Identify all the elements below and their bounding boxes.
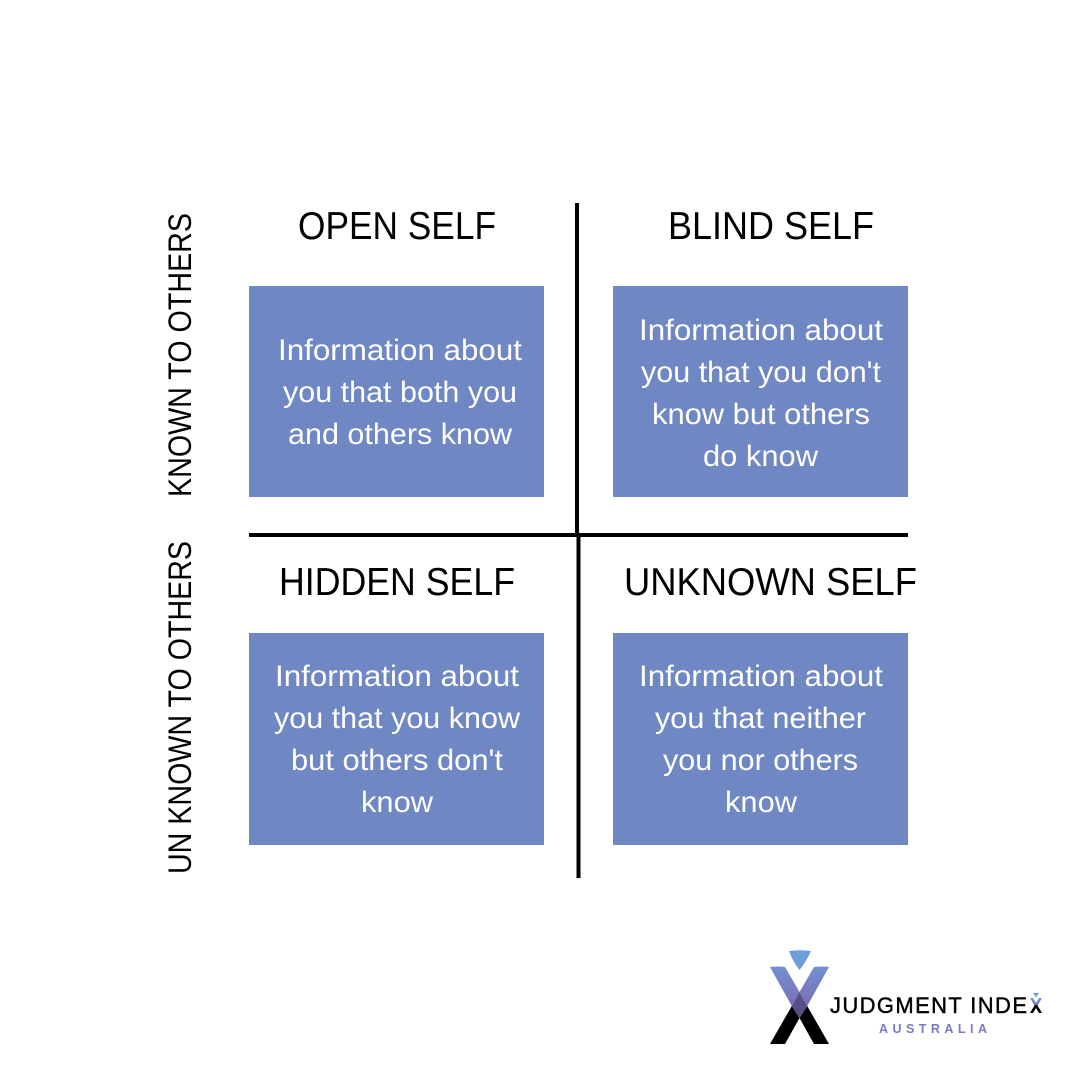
heading: hidden self: HIDDEN SELF: [279, 561, 515, 604]
box: hidden self: [249, 633, 544, 845]
box: open self: [249, 286, 544, 497]
side label: known to others: KNOWN TO OTHERS: [162, 213, 198, 497]
box: unknown self: [613, 633, 908, 845]
horizontal divider: [249, 533, 908, 537]
tagline: AUSTRALIA: [879, 1022, 987, 1036]
box: blind self: do know: [703, 440, 818, 473]
box: open self: and others know: [288, 418, 512, 451]
heading: blind self: BLIND SELF: [668, 205, 874, 248]
side label: unknown to others: UN KNOWN TO OTHERS: [162, 541, 198, 874]
panel: unknown self: [613, 561, 917, 845]
box: hidden self: know: [361, 786, 433, 819]
box: unknown self: know: [725, 786, 797, 819]
icon: X figure mark: [770, 950, 829, 1044]
box: unknown self: you nor others: [663, 744, 858, 777]
box: hidden self: you that you know: [274, 702, 520, 735]
heading: unknown self: UNKNOWN SELF: [624, 561, 917, 604]
box: blind self: know but others: [652, 398, 870, 431]
box: unknown self: you that neither: [655, 702, 866, 735]
wordmark: JUDGMENT INDE: [830, 993, 1027, 1018]
box: unknown self: Information about: [639, 660, 884, 693]
heading: open self: OPEN SELF: [298, 205, 496, 248]
box: hidden self: Information about: [275, 660, 520, 693]
box: hidden self: but others don't: [291, 744, 504, 777]
panel: hidden self: [249, 561, 544, 845]
logo: Judgment Index Australia: [770, 950, 1042, 1044]
vertical divider: [575, 203, 580, 878]
box: open self: Information about: [278, 334, 523, 367]
panel: blind self: [613, 205, 908, 497]
panel: open self: [249, 205, 544, 497]
box: blind self: [613, 286, 908, 497]
box: blind self: you that you don't: [641, 356, 882, 389]
box: open self: you that both you: [283, 376, 517, 409]
box: blind self: Information about: [639, 314, 884, 347]
icon: small X in wordmark: [1030, 993, 1042, 1013]
